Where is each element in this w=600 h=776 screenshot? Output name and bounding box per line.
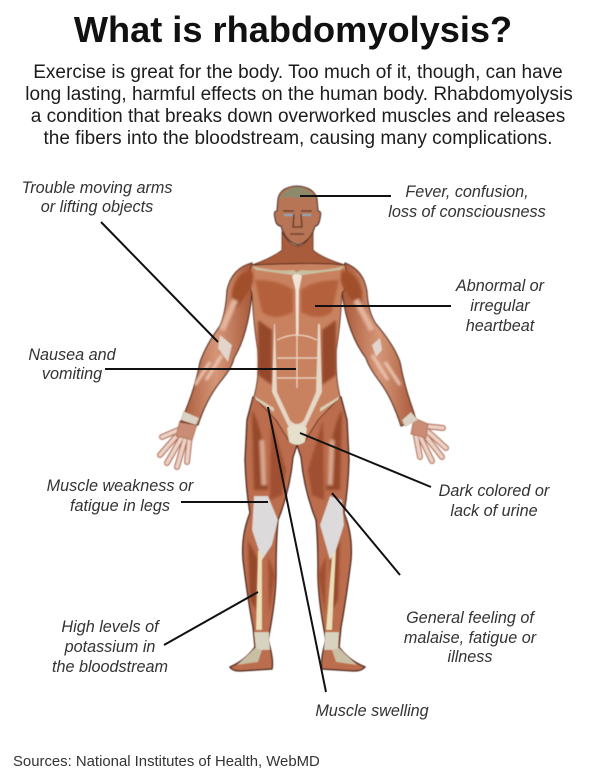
- title: What is rhabdomyolysis?: [74, 9, 512, 50]
- callout: fever: Fever, confusion,: [405, 183, 529, 201]
- callout: muscle weakness: [47, 477, 268, 515]
- callout: potassium: High levels of: [61, 618, 160, 636]
- head: [274, 186, 321, 245]
- right hand: [411, 418, 446, 461]
- callout: potassium: potassium in: [64, 638, 155, 656]
- legs: [230, 397, 365, 671]
- callout: dark urine: lack of urine: [450, 502, 538, 520]
- callout: muscle swelling: Muscle swelling: [315, 702, 429, 720]
- left arm: [181, 263, 252, 425]
- callout: muscle weakness: fatigue in legs: [70, 497, 170, 515]
- callout: nausea: [28, 346, 296, 383]
- callout: abnormal heartbeat: heartbeat: [466, 317, 536, 335]
- intro paragraph: Exercise is great for the body. Too much of it, though, can have: [33, 62, 563, 83]
- callout: nausea: vomiting: [42, 365, 102, 383]
- intro paragraph: a condition that breaks down overworked muscles and releases: [31, 106, 565, 127]
- intro paragraph: [25, 62, 573, 149]
- anatomical body figure: [160, 186, 446, 671]
- left hand: [160, 421, 197, 467]
- callout: malaise: [332, 493, 537, 666]
- right arm: [342, 263, 416, 426]
- callout: fever: [300, 183, 546, 221]
- sources: Sources: National Institutes of Health, WebMD: [13, 754, 320, 770]
- callout: potassium: the bloodstream: [52, 658, 168, 676]
- callout: abnormal heartbeat: Abnormal or: [455, 277, 545, 295]
- callout: potassium: [52, 592, 258, 676]
- callout: fever: loss of consciousness: [388, 203, 546, 221]
- callout: muscle swelling: [268, 407, 429, 720]
- callout: muscle weakness: Muscle weakness or: [47, 477, 194, 495]
- muscle detail shading: [195, 270, 400, 615]
- callout: nausea: Nausea and: [28, 346, 117, 364]
- callout: trouble moving arms: Trouble moving arms: [22, 179, 172, 197]
- callout: dark urine: Dark colored or: [439, 482, 550, 500]
- callout: trouble moving arms: or lifting objects: [41, 198, 153, 216]
- neck and trapezius: [252, 232, 345, 265]
- callout: malaise: General feeling of: [406, 609, 535, 627]
- intro paragraph: long lasting, harmful effects on the human body. Rhabdomyolysis: [25, 84, 573, 105]
- callout: malaise: illness: [448, 648, 492, 666]
- torso: [248, 264, 347, 444]
- tendons and highlights: [181, 266, 418, 665]
- callout: trouble moving arms: [22, 179, 218, 342]
- callout: abnormal heartbeat: [315, 277, 545, 335]
- intro paragraph: the fibers into the bloodstream, causing many complications.: [43, 128, 553, 149]
- callout: malaise: malaise, fatigue or: [404, 629, 537, 647]
- callout: dark urine: [300, 433, 550, 520]
- callout: abnormal heartbeat: irregular: [470, 297, 530, 315]
